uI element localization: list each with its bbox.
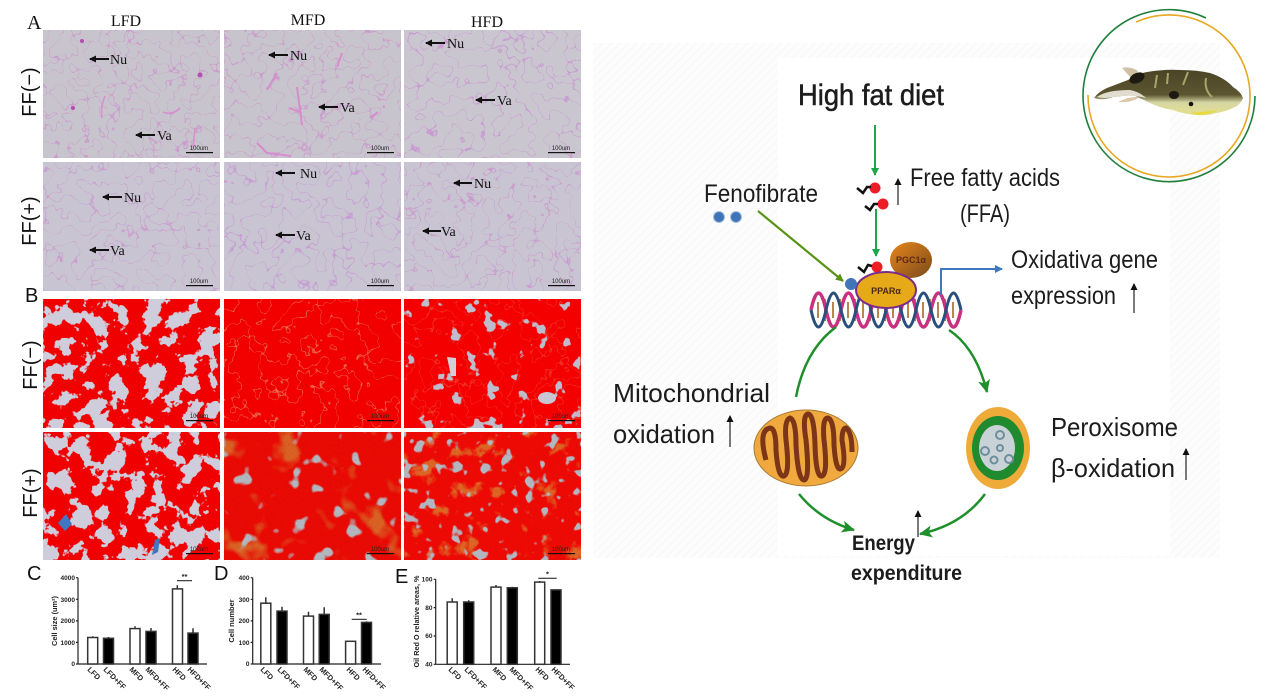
y axis title: Cell number [227, 599, 236, 643]
x axis labels: LFD [447, 665, 464, 682]
PPARa protein [856, 272, 916, 308]
free fatty acid molecules [857, 182, 888, 272]
micrograph HFD FF minus [404, 30, 581, 158]
y axis ticks: 100 [239, 640, 250, 647]
label: energy expenditure: expenditure [851, 562, 962, 585]
column headings: LFD [111, 13, 141, 30]
y axis ticks: 80 [425, 605, 433, 612]
y axis title: Cell size (um²) [50, 596, 59, 646]
icon: pufferfish [1094, 67, 1243, 115]
micrograph MFD FF minus: Nu [290, 49, 307, 64]
y axis ticks: 200 [239, 618, 250, 625]
micrograph HFD FF plus: 100um [552, 279, 570, 285]
x axis labels: LFD+FF [102, 665, 128, 692]
PPARa protein: PPARα [871, 286, 901, 296]
label: mitochondrial oxidation: Mitochondrial [613, 378, 770, 408]
micrograph HFD FF minus: Nu [447, 37, 464, 52]
x axis labels: MFD [128, 665, 146, 683]
y axis title: Oil Red O relative areas, % [412, 575, 421, 668]
x axis labels: MFD [491, 665, 509, 683]
arrow up: peroxisome [1185, 449, 1187, 480]
bars [88, 585, 198, 664]
y axis ticks: 3000 [61, 597, 75, 604]
micrograph LFD FF plus: Va [110, 244, 126, 259]
micrograph HFD FF plus: Va [441, 225, 457, 240]
panel label A: A [27, 12, 42, 34]
arrow up: mitochondrial [729, 416, 731, 447]
y axis ticks: 40 [425, 662, 433, 668]
x axis labels: MFD [302, 665, 320, 683]
label: energy expenditure [851, 532, 962, 585]
micrograph HFD FF minus: 100um [552, 146, 570, 152]
arrow: gene expression [941, 269, 1002, 295]
significance marker: ** [356, 610, 362, 620]
column headings: MFD [291, 12, 325, 29]
y axis ticks: 1000 [61, 640, 75, 647]
arrow: diet to FFA [874, 125, 876, 175]
heading: high fat diet: High fat diet [798, 79, 945, 112]
x axis labels: MFD+FF [508, 665, 535, 693]
green ring [1083, 10, 1255, 182]
y axis ticks: 300 [239, 597, 250, 604]
arrow up: FFA [897, 179, 899, 205]
significance marker: ** [182, 572, 187, 581]
micrograph LFD FF minus: 100um [190, 146, 208, 152]
stain HFD FF minus [404, 299, 581, 428]
arrow up: gene expression [1133, 284, 1135, 313]
label: oxidative gene expression: Oxidativa gene [1011, 246, 1158, 274]
micrograph LFD FF minus: Va [157, 129, 173, 144]
y axis ticks: 2000 [61, 618, 75, 625]
label: free fatty acids [910, 164, 1060, 228]
y axis ticks: 4000 [61, 575, 75, 582]
panel A: histology [19, 12, 581, 291]
stain MFD FF minus: 100um [371, 414, 389, 420]
y axis ticks: 0 [71, 661, 75, 668]
micrograph LFD FF plus: Nu [124, 191, 141, 206]
curved arrow: to peroxisome [949, 330, 987, 392]
x axis labels: LFD+FF [276, 665, 302, 692]
x axis labels: HFD [345, 665, 362, 683]
micrograph MFD FF plus [224, 162, 401, 291]
y axis ticks [239, 575, 381, 668]
x axis labels: LFD+FF [463, 665, 489, 692]
stain MFD FF plus: 100um [371, 547, 389, 553]
stain LFD FF minus [43, 299, 220, 428]
panel label D: D [214, 563, 228, 585]
micrograph MFD FF minus: 100um [371, 146, 389, 152]
label: peroxisome oxidation [1051, 412, 1178, 483]
x axis labels: LFD [259, 665, 276, 682]
row label FF plus: FF(+) [20, 468, 42, 518]
micrograph HFD FF minus: Va [497, 94, 513, 109]
row label FF plus: FF(+) [19, 196, 41, 246]
label: energy expenditure: Energy [852, 532, 915, 555]
y axis ticks [422, 576, 570, 668]
micrograph MFD FF plus: Nu [300, 167, 317, 182]
panel label C: C [27, 563, 41, 585]
micrograph LFD FF plus [43, 162, 220, 291]
stain MFD FF plus [224, 432, 401, 560]
x axis labels [447, 665, 577, 693]
row label FF minus: FF(−) [19, 67, 41, 117]
y axis ticks [61, 575, 207, 668]
curved arrow: to mitochondria [796, 327, 836, 397]
y axis ticks: 400 [239, 575, 250, 582]
ligand on receptor [845, 278, 857, 290]
y axis ticks: 100 [422, 576, 433, 584]
icon: mitochondrion [754, 410, 858, 486]
significance marker: * [546, 570, 549, 578]
arrow up: energy [917, 511, 919, 537]
label: oxidative gene expression [1011, 246, 1158, 310]
micrograph LFD FF minus: Nu [110, 53, 127, 68]
curved arrow: peroxisome to energy [920, 494, 985, 534]
stain LFD FF minus: 100um [190, 414, 208, 420]
stain HFD FF minus: 100um [552, 414, 570, 420]
stain MFD FF minus [224, 299, 401, 428]
chart D: cell number [214, 563, 388, 693]
label: mitochondrial oxidation: oxidation [613, 419, 715, 449]
icon: peroxisome [966, 407, 1030, 489]
column headings: HFD [471, 14, 503, 31]
PGC1a protein [890, 242, 932, 278]
column headings [111, 12, 503, 31]
x axis labels: LFD [86, 665, 103, 682]
stain LFD FF plus [43, 432, 220, 560]
micrograph LFD FF plus: 100um [190, 279, 208, 285]
label: free fatty acids: Free fatty acids [910, 164, 1060, 192]
significance marker [177, 572, 192, 581]
x axis labels: HFD+FF [361, 665, 388, 692]
micrograph MFD FF plus: Va [296, 229, 312, 244]
panel label B: B [25, 285, 38, 307]
arrow: FFA to PPAR [875, 209, 877, 256]
fenofibrate dots [714, 212, 742, 222]
background hatch panel [593, 43, 1220, 558]
chart C: cell size [27, 563, 213, 693]
orange ring [1088, 15, 1250, 177]
label: fenofibrate: Fenofibrate [704, 180, 818, 208]
x axis labels: HFD+FF [186, 665, 213, 692]
micrograph HFD FF plus: Nu [474, 177, 491, 192]
significance marker [538, 570, 557, 578]
label: oxidative gene expression: expression [1011, 282, 1116, 310]
label: peroxisome oxidation: β-oxidation [1051, 453, 1175, 483]
bars [261, 597, 372, 664]
curved arrow: mitochondria to energy [799, 494, 854, 530]
label: peroxisome oxidation: Peroxisome [1051, 412, 1178, 442]
arrow: fenofibrate to PPAR [758, 211, 843, 281]
label: free fatty acids: (FFA) [960, 200, 1010, 228]
micrograph HFD FF plus [404, 162, 581, 291]
panel B: Oil Red O staining [20, 285, 581, 560]
row label FF minus: FF(−) [20, 340, 42, 390]
micrograph MFD FF minus [224, 30, 401, 158]
stain LFD FF plus: 100um [190, 547, 208, 553]
PGC1a protein: PGC1α [896, 255, 926, 265]
micrograph LFD FF minus [43, 30, 220, 158]
significance marker [352, 610, 367, 620]
bars [447, 581, 561, 664]
x axis labels: HFD+FF [550, 665, 577, 692]
fish badge [1083, 10, 1255, 182]
x axis labels: MFD+FF [318, 665, 345, 693]
panel label E: E [395, 566, 408, 588]
x axis labels: HFD [534, 665, 551, 683]
micrograph MFD FF minus: Va [340, 101, 356, 116]
y axis ticks: 0 [246, 661, 250, 668]
x axis labels: MFD+FF [144, 665, 171, 693]
stain HFD FF plus [404, 432, 581, 560]
y axis ticks: 60 [425, 633, 433, 640]
micrograph MFD FF plus: 100um [371, 279, 389, 285]
pathway diagram [613, 79, 1186, 585]
x axis labels: HFD [171, 665, 188, 683]
x axis labels [259, 665, 388, 693]
chart E: oil red O relative areas [395, 566, 577, 693]
label: mitochondrial oxidation [613, 378, 770, 449]
x axis labels [86, 665, 213, 693]
stain HFD FF plus: 100um [552, 547, 570, 553]
DNA helix [811, 293, 961, 327]
